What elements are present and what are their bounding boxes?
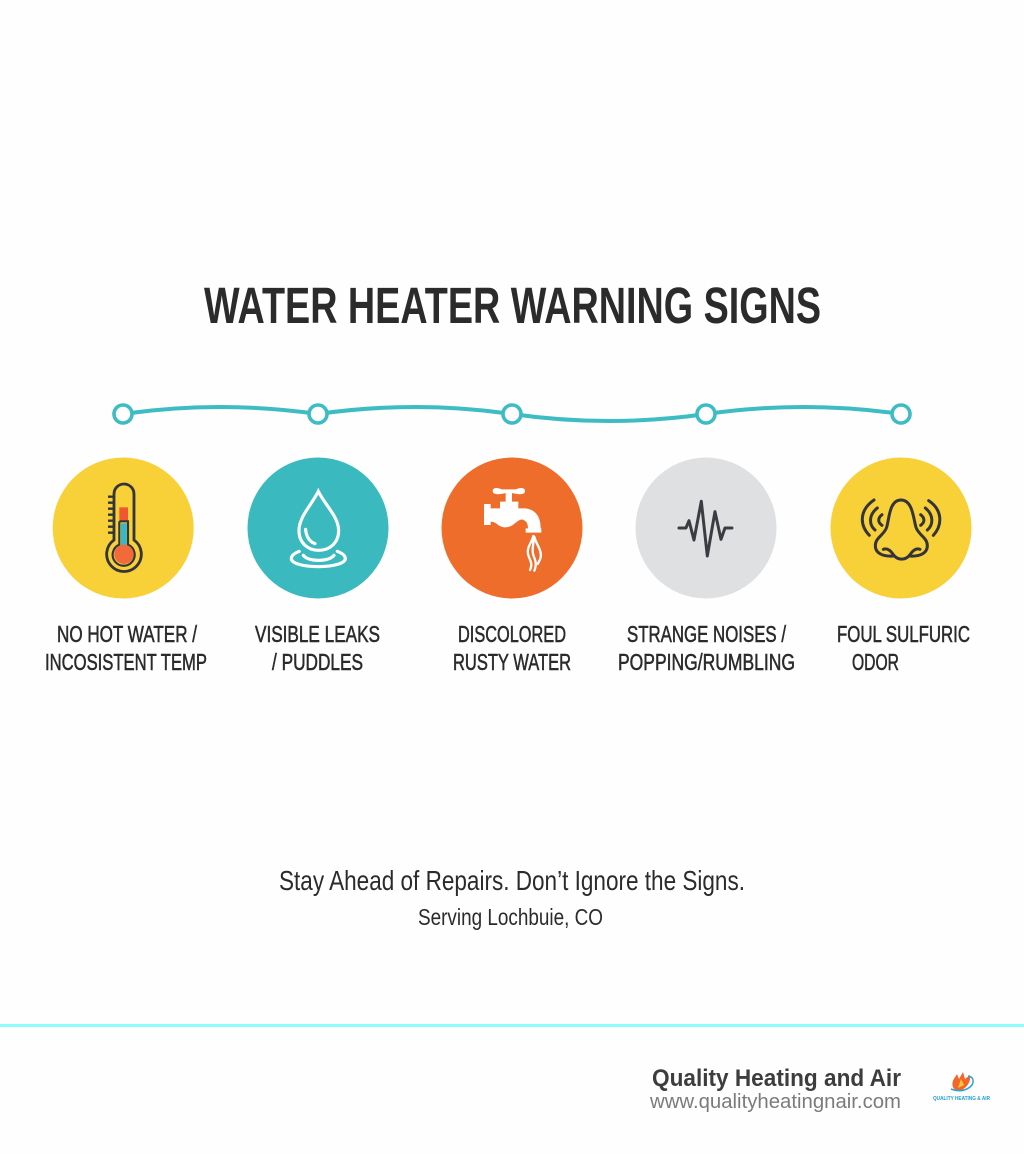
label: discolored rusty water: RUSTY WATER — [453, 649, 571, 675]
label: strange noises — [618, 621, 795, 675]
panel: foul odor — [830, 458, 972, 675]
title: WATER HEATER WARNING SIGNS — [204, 277, 821, 334]
label: foul sulfuric odor: ODOR — [852, 649, 899, 675]
timeline connector — [114, 405, 910, 423]
label: discolored rusty water — [453, 621, 571, 675]
label: visible leaks — [255, 621, 380, 675]
icon: water drop — [248, 458, 388, 598]
icon: dripping faucet — [442, 458, 582, 598]
panel: no hot water — [45, 458, 207, 675]
tagline: Stay Ahead of Repairs. Don’t Ignore the Signs. — [279, 865, 745, 896]
label: strange noises: POPPING/RUMBLING — [618, 649, 795, 675]
footer logo: QUALITY HEATING & AIR — [933, 1096, 990, 1102]
label: foul sulfuric odor: FOUL SULFURIC — [837, 621, 970, 647]
tagline — [279, 865, 745, 930]
label: discolored rusty water: DISCOLORED — [458, 621, 566, 647]
label: no hot water — [45, 621, 207, 675]
footer logo — [933, 1072, 990, 1102]
label: visible leaks: / PUDDLES — [272, 649, 363, 675]
panel: strange noises — [618, 458, 795, 675]
panel: discolored water — [442, 458, 582, 675]
label: visible leaks: VISIBLE LEAKS — [255, 621, 380, 647]
footer company name and website — [649, 1065, 901, 1113]
tagline: Serving Lochbuie, CO — [418, 904, 603, 930]
icon: nose with odor waves — [830, 458, 972, 598]
label: no hot water: NO HOT WATER / — [57, 621, 197, 647]
footer company name and website: www.qualityheatingnair.com — [649, 1091, 901, 1113]
label: strange noises: STRANGE NOISES / — [627, 621, 786, 647]
panel: visible leaks — [248, 458, 388, 675]
footer company name and website: Quality Heating and Air — [652, 1065, 901, 1092]
label: foul sulfuric odor — [837, 621, 970, 675]
icon: sound pulse — [636, 458, 776, 598]
footer divider — [0, 1024, 1024, 1027]
icon: thermometer — [53, 458, 194, 598]
label: no hot water: INCOSISTENT TEMP — [45, 649, 207, 675]
